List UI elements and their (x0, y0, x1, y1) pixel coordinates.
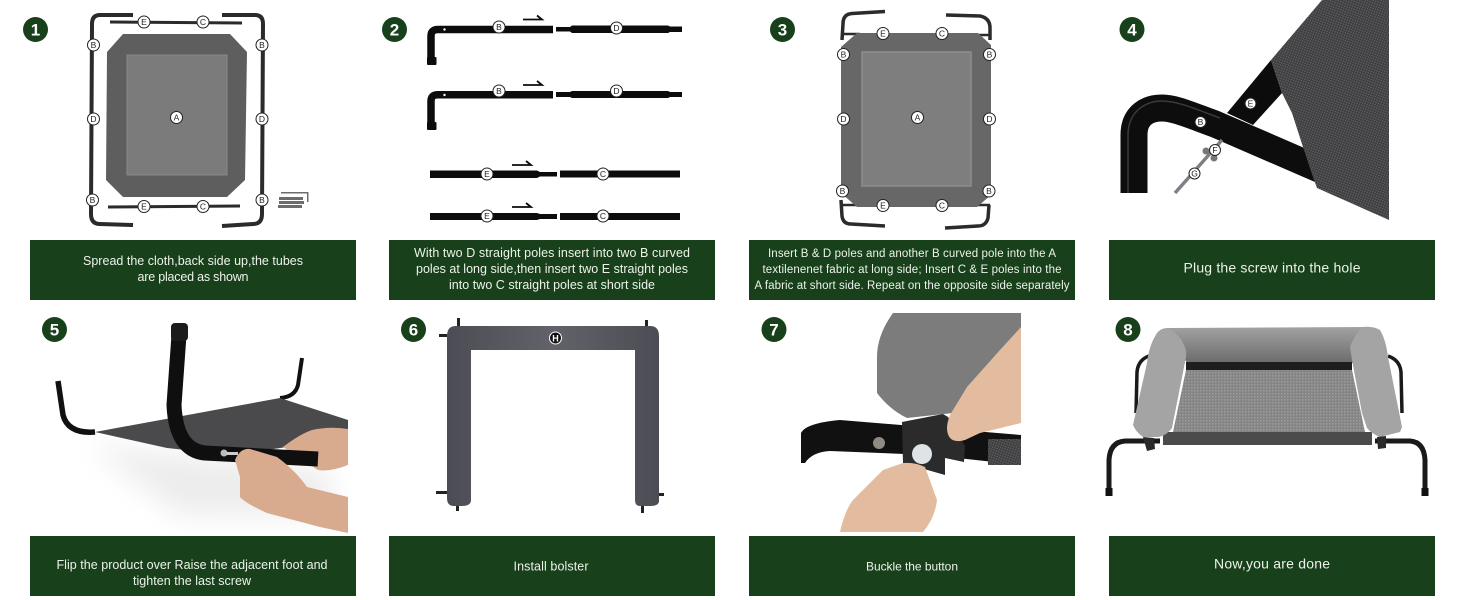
panel: step 3 (749, 12, 1075, 300)
part labels: E (141, 17, 147, 27)
caption bar (389, 536, 715, 596)
part labels: B (987, 50, 993, 60)
mesh at tube end (988, 439, 1021, 465)
step number 4: 4 (1127, 20, 1137, 40)
part label H (550, 332, 562, 344)
part labels: B (1198, 117, 1204, 127)
caption bar: textilenenet fabric at long side; Insert C & E poles into the (762, 264, 1062, 276)
curved pole B (1128, 101, 1335, 193)
part labels: D (986, 114, 993, 124)
caption bar (749, 536, 1075, 596)
step number 1 (23, 17, 48, 42)
feet caps (1106, 488, 1428, 496)
caption bar (30, 240, 356, 300)
fabric A fitted on poles (841, 33, 991, 207)
corner tubes (841, 12, 990, 228)
screw and hex key (1175, 140, 1222, 193)
far bed legs (58, 358, 302, 432)
step number 2: 2 (390, 20, 399, 40)
part labels: D (259, 114, 265, 124)
part labels: E (880, 28, 886, 38)
curved and straight poles, long side, bottom: B (496, 86, 502, 96)
dark gap (1186, 362, 1352, 370)
panel: step 6 (389, 317, 715, 596)
caption bar (389, 240, 715, 300)
curved and straight poles, long side, top: B (496, 22, 502, 32)
step number 8 (1116, 317, 1140, 342)
straight poles, short side, top: E (484, 169, 490, 179)
part labels: B (840, 186, 846, 196)
panel: step 7 (749, 313, 1075, 596)
panel: step 1 (23, 15, 356, 300)
pole E (1227, 60, 1282, 125)
caption bar (1109, 240, 1435, 300)
part labels: C (939, 200, 945, 210)
part labels (86, 16, 268, 212)
U-shaped bolster (447, 326, 659, 506)
caption bar: poles at long side,then insert two E straight poles (416, 262, 688, 276)
step number 7 (762, 317, 786, 342)
part labels: B (90, 195, 96, 205)
caption bar: With two D straight poles insert into two B curved (414, 246, 690, 260)
straight poles, short side, bottom (430, 203, 680, 222)
step number 8: 8 (1123, 320, 1133, 340)
part labels (1189, 98, 1256, 179)
snap button (912, 444, 932, 464)
curved and straight poles, long side, bottom: D (613, 86, 620, 96)
right bolster (1350, 327, 1402, 437)
caption bar: Flip the product over Raise the adjacent foot and (56, 558, 328, 572)
tube layout (91, 15, 263, 226)
panel: step 5 (30, 317, 356, 596)
part labels: B (986, 186, 992, 196)
curved and straight poles, long side, bottom (427, 81, 682, 130)
caption bar: Spread the cloth,back side up,the tubes (83, 254, 303, 268)
screws and hex key (278, 192, 308, 208)
mesh bed (1173, 370, 1365, 432)
part labels: B (91, 40, 97, 50)
caption bar: A fabric at short side. Repeat on the opposite side separately (754, 280, 1070, 292)
part labels: C (200, 202, 206, 212)
step number 6 (401, 317, 426, 342)
caption bar (1109, 536, 1435, 596)
bolster clips (1143, 436, 1386, 451)
caption bar: are placed as shown (138, 270, 249, 284)
floor shadow (90, 445, 330, 515)
step number 1: 1 (31, 20, 40, 40)
part labels: F (1212, 145, 1218, 155)
part labels: D (90, 114, 97, 124)
grey bolster (877, 313, 1021, 418)
hand with wrench (235, 449, 348, 533)
step number 3: 3 (778, 20, 787, 40)
straight poles, short side, bottom: E (484, 211, 490, 221)
step number 6: 6 (409, 320, 418, 340)
step number 4 (1120, 17, 1144, 42)
panel: step 4 (1109, 0, 1435, 300)
caption bar: Insert B & D poles and another B curved pole into the A (768, 248, 1056, 260)
caption bar: into two C straight poles at short side (449, 278, 655, 292)
frame legs and handles (1109, 356, 1425, 495)
front edge (1163, 432, 1372, 445)
part labels: E (1248, 98, 1254, 108)
caption bar: Buckle the button (866, 560, 958, 574)
caption bar: tighten the last screw (133, 574, 252, 588)
step number 3 (770, 17, 795, 42)
mesh fabric (1271, 0, 1389, 220)
hand on frame (283, 428, 348, 470)
panel: step 8 (1106, 317, 1435, 596)
black foot cap (171, 323, 188, 341)
fabric underside (95, 398, 348, 455)
part labels: A (915, 112, 921, 122)
part labels: B (259, 40, 265, 50)
back bolster (1167, 327, 1367, 363)
part labels: E (880, 200, 886, 210)
caption bar: Install bolster (514, 560, 588, 574)
left bolster (1133, 328, 1186, 437)
panel: step 2 (382, 16, 715, 300)
step number 2 (382, 17, 407, 42)
step number 7: 7 (769, 320, 779, 340)
part label H: H (552, 334, 559, 344)
straight poles, short side, bottom: C (600, 211, 606, 221)
part labels: C (939, 28, 945, 38)
part labels: E (141, 202, 147, 212)
part labels: A (174, 112, 180, 122)
part labels: G (1191, 168, 1198, 178)
part labels (836, 28, 996, 212)
screw (220, 450, 238, 456)
caption bar: Now,you are done (1214, 556, 1330, 572)
step number 5: 5 (50, 320, 59, 340)
part labels: B (259, 195, 265, 205)
tube with bed frame (174, 335, 318, 459)
straight poles, short side, top (430, 161, 680, 180)
right hand (947, 327, 1021, 441)
caption bar: Plug the screw into the hole (1184, 260, 1361, 276)
step number 5 (42, 317, 67, 342)
black tube (801, 420, 1021, 465)
bolt (873, 437, 885, 449)
bolster straps (436, 318, 664, 513)
fabric A, back side up (106, 34, 247, 197)
strap (902, 414, 965, 475)
part labels: D (840, 114, 847, 124)
straight poles, short side, top: C (600, 169, 606, 179)
lower hand (840, 463, 937, 532)
caption bar (30, 536, 356, 596)
part labels: C (200, 17, 206, 27)
caption bar (749, 240, 1075, 300)
curved and straight poles, long side, top: D (613, 23, 620, 33)
part labels: B (841, 50, 847, 60)
curved and straight poles, long side, top (427, 16, 682, 65)
